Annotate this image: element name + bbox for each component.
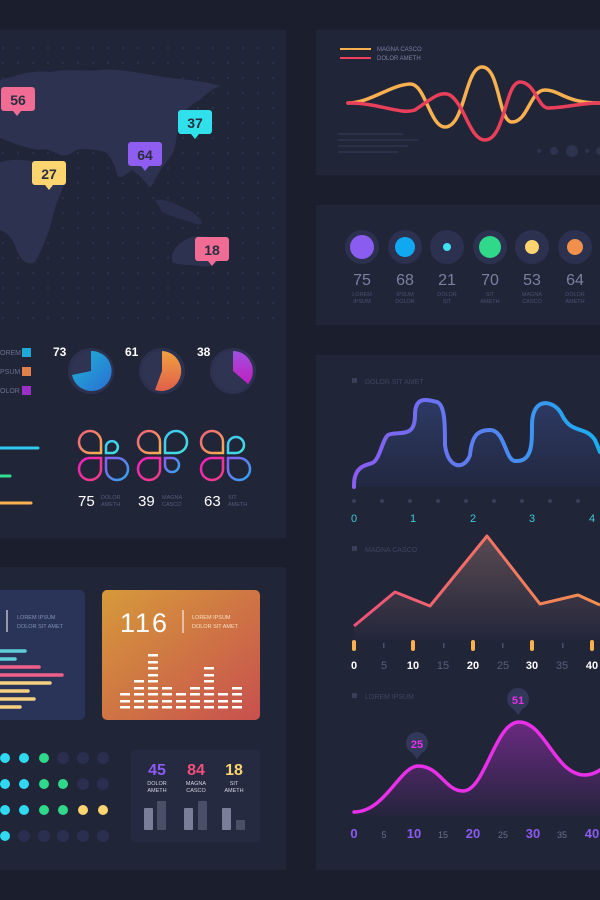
- wave chart legend: MAGNA CASCO: [377, 47, 422, 53]
- circle stats row: 21: [438, 272, 456, 289]
- chart: lorem ipsum curve: 5: [381, 830, 387, 840]
- chart: lorem ipsum curve: 30: [526, 826, 540, 841]
- text: AMETH: [101, 502, 120, 508]
- text: AMETH: [228, 502, 247, 508]
- circle stats row: MAGNA: [522, 292, 542, 298]
- circle stats row: IPSUM: [396, 292, 414, 298]
- chart: lorem ipsum curve: [350, 688, 600, 841]
- chart: lorem ipsum curve: 15: [438, 830, 448, 840]
- chart: lorem ipsum curve: 40: [585, 826, 599, 841]
- chart: lorem ipsum curve: 20: [466, 826, 480, 841]
- circle stats row: [345, 230, 592, 305]
- chart: magna casco line: 30: [526, 660, 538, 672]
- chart: dolor sit amet wave: 4: [589, 513, 595, 525]
- circle stats row: 68: [396, 272, 414, 289]
- chart: magna casco line: [351, 536, 600, 672]
- circle stats row: DOLOR: [437, 292, 457, 298]
- flower 2: [138, 431, 187, 480]
- chart: lorem ipsum curve: 0: [350, 826, 358, 841]
- circle stats row: LOREM: [352, 292, 372, 298]
- circle stats row: IPSUM: [353, 299, 371, 305]
- chart: magna casco line: 25: [497, 660, 509, 672]
- circle stats row: AMETH: [565, 299, 585, 305]
- circle stats row: 70: [481, 272, 499, 289]
- pie chart: 61: [125, 345, 185, 394]
- chart: dolor sit amet wave: DOLOR SIT AMET: [365, 379, 424, 386]
- card: 116 equalizer: LOREM IPSUM: [192, 615, 231, 621]
- marker: 27: 27: [41, 166, 57, 182]
- bars: horizontal progress lines: [0, 448, 38, 503]
- card: 116 equalizer: 116: [120, 608, 169, 638]
- flower stats labels: 75: [78, 493, 95, 510]
- pie chart: 61: 61: [125, 345, 139, 359]
- chart: dolor sit amet wave: 2: [470, 513, 476, 525]
- circle stats row: AMETH: [480, 299, 500, 305]
- card: stats 45 84 18: 45: [148, 762, 166, 779]
- pie chart: 73: [53, 345, 114, 394]
- chart: magna casco line: 35: [556, 660, 568, 672]
- circle stats row: SIT: [443, 299, 452, 305]
- chart: magna casco line: 0: [351, 660, 357, 672]
- marker: 18: 18: [204, 242, 220, 258]
- circle stats row: 75: [353, 272, 371, 289]
- legend: pie chart legend: [0, 348, 31, 395]
- marker: 37: 37: [187, 115, 203, 131]
- marker: 56: [1, 87, 35, 116]
- flower stats labels: 39: [138, 493, 155, 510]
- marker: 56: 56: [10, 92, 26, 108]
- legend: pie chart legend: OREM: [0, 350, 21, 357]
- marker: 37: [178, 110, 212, 139]
- panel: bottom left: [0, 567, 286, 870]
- chart: dolor sit amet wave: 1: [410, 513, 416, 525]
- card: stats 45 84 18: AMETH: [224, 788, 244, 794]
- card: stats 45 84 18: SIT: [230, 781, 239, 787]
- chart: magna casco line: 15: [437, 660, 449, 672]
- card: stats 45 84 18: AMETH: [147, 788, 167, 794]
- chart: magna casco line: 20: [467, 660, 479, 672]
- text: CASCO: [162, 502, 182, 508]
- chart: dolor sit amet wave: [351, 378, 600, 525]
- wave chart legend: [340, 47, 422, 62]
- pie chart: 38: 38: [197, 345, 211, 359]
- marker: 64: [128, 142, 162, 171]
- card: 116 equalizer: DOLOR SIT AMET: [192, 624, 239, 630]
- chart: lorem ipsum curve: 51: [512, 695, 524, 707]
- wave text block: [338, 133, 418, 153]
- panel: wave chart: [316, 30, 600, 175]
- wave chart legend: DOLOR AMETH: [377, 56, 421, 62]
- flower 3: [201, 431, 250, 480]
- chart: magna casco line: 40: [586, 660, 598, 672]
- circle stats row: 53: [523, 272, 541, 289]
- legend: pie chart legend: PSUM: [0, 369, 20, 376]
- card: stats 45 84 18: CASCO: [186, 788, 206, 794]
- flower stats labels: [78, 493, 221, 510]
- chart: dolor sit amet wave: 0: [351, 513, 357, 525]
- circle stats row: SIT: [486, 292, 495, 298]
- panel: map and stats: [0, 30, 286, 538]
- chart: dolor sit amet wave: 3: [529, 513, 535, 525]
- chart: lorem ipsum curve: LOREM IPSUM: [365, 694, 414, 701]
- circle stats row: DOLOR: [395, 299, 415, 305]
- marker: 64: 64: [137, 147, 153, 163]
- map: world map: [0, 40, 280, 330]
- marker: 27: [32, 161, 66, 190]
- panel: line charts: [316, 355, 600, 870]
- card: stats 45 84 18: 18: [225, 762, 243, 779]
- wave chart: oscillating lines: [348, 67, 600, 140]
- card: blue bar list: LOREM IPSUM: [17, 615, 56, 621]
- pie chart: 73: 73: [53, 345, 67, 359]
- chart: magna casco line: 10: [407, 660, 419, 672]
- card: stats 45 84 18: MAGNA: [186, 781, 206, 787]
- card: blue bar list: [0, 590, 85, 720]
- panel: circle stats: [316, 205, 600, 325]
- circle stats row: DOLOR: [565, 292, 585, 298]
- chart: magna casco line: 5: [381, 660, 387, 672]
- card: stats 45 84 18: 84: [187, 762, 205, 779]
- chart: lorem ipsum curve: 25: [411, 739, 423, 751]
- flower 1: [79, 431, 128, 480]
- card: blue bar list: DOLOR SIT AMET: [17, 624, 64, 630]
- flower stats labels: 63: [204, 493, 221, 510]
- pie chart: 38: [197, 345, 256, 394]
- chart: magna casco line: MAGNA CASCO: [365, 547, 418, 554]
- dot grid matrix: [0, 752, 109, 842]
- text: MAGNA: [162, 495, 182, 501]
- flower icons: [79, 431, 250, 480]
- chart: lorem ipsum curve: 10: [407, 826, 421, 841]
- legend: pie chart legend: OLOR: [0, 388, 20, 395]
- circle stats row: CASCO: [522, 299, 542, 305]
- text: SIT: [228, 495, 237, 501]
- chart: lorem ipsum curve: 35: [557, 830, 567, 840]
- card: 116 equalizer: [102, 590, 260, 720]
- circle stats row: 64: [566, 272, 584, 289]
- chart: lorem ipsum curve: 25: [498, 830, 508, 840]
- card: stats 45 84 18: DOLOR: [147, 781, 167, 787]
- marker: 18: [195, 237, 229, 266]
- card: stats 45 84 18: [131, 750, 260, 842]
- text: DOLOR: [101, 495, 121, 501]
